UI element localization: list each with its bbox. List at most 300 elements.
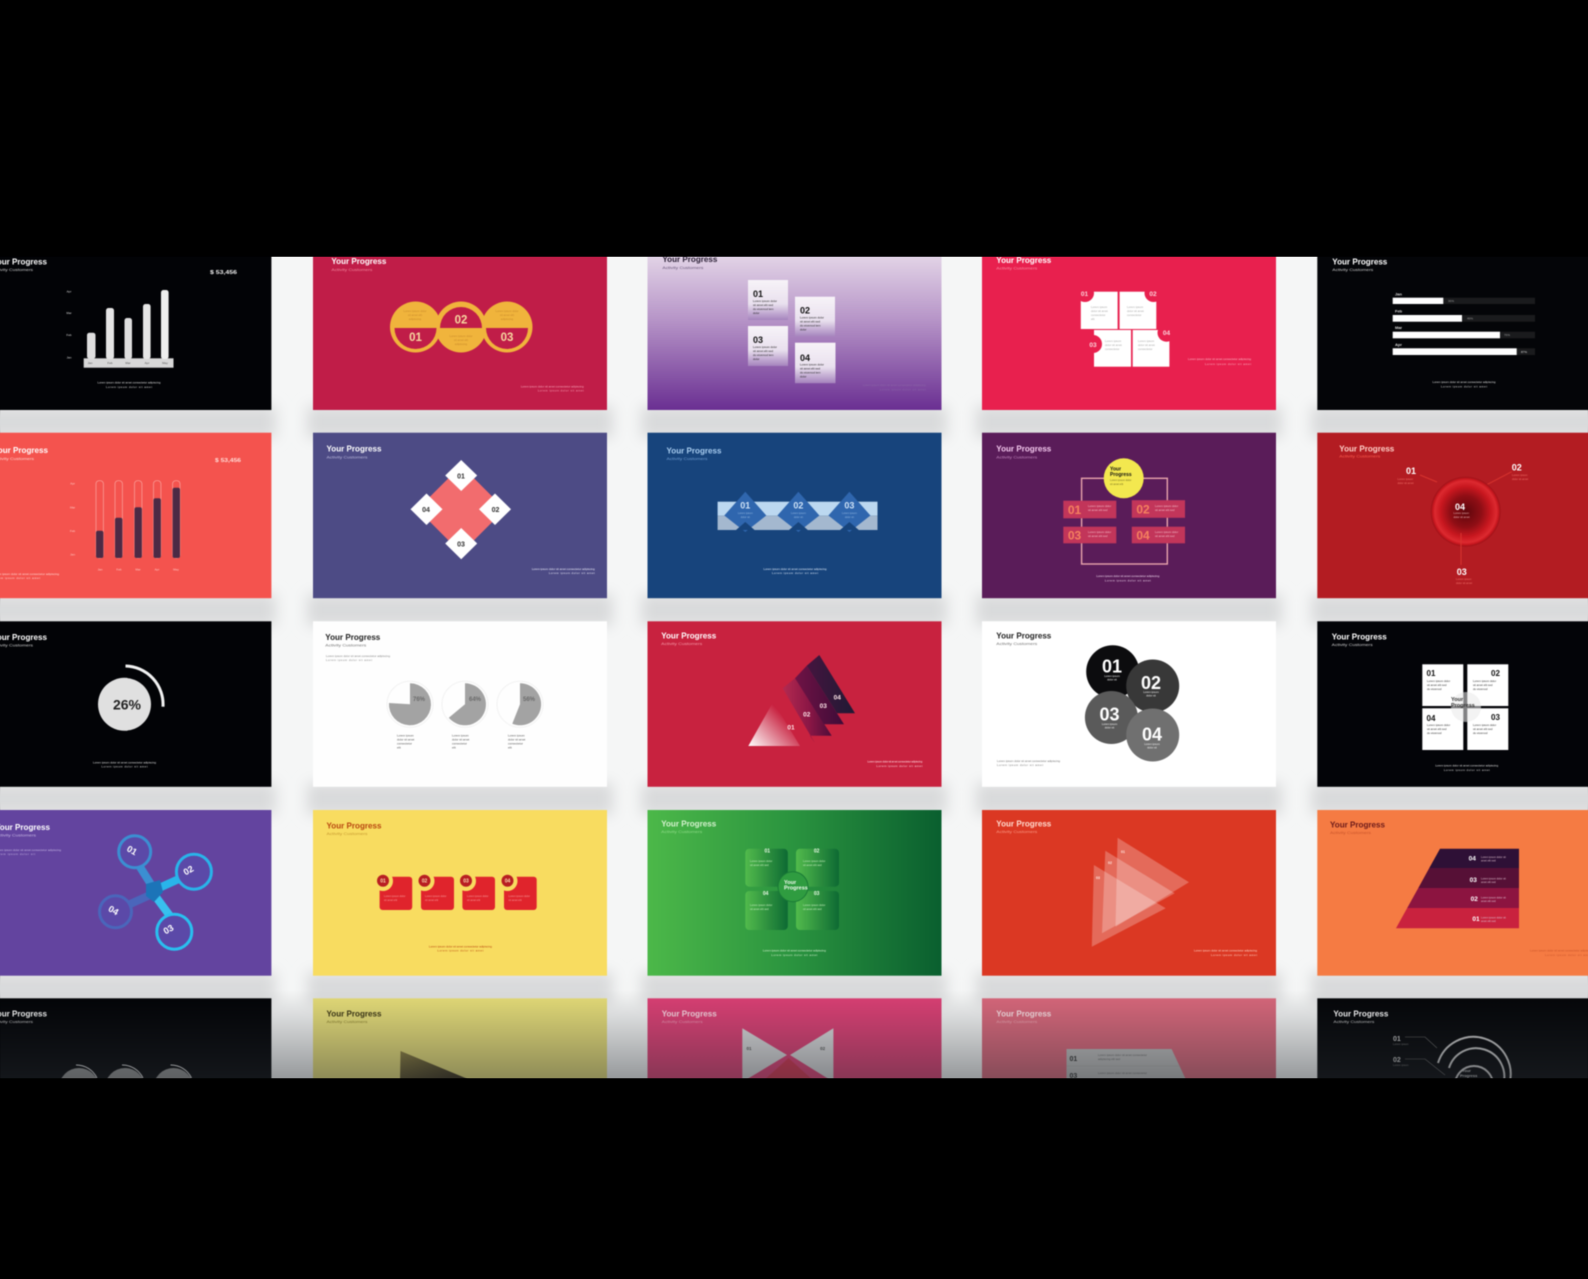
heading xyxy=(326,444,382,460)
heading: Your Progress xyxy=(996,819,1052,829)
caption xyxy=(1188,357,1251,366)
heading: Activity Customers xyxy=(1339,454,1380,458)
quad cards: do eiusmod xyxy=(1473,687,1488,691)
hub and spokes: 01 xyxy=(125,844,139,857)
heading xyxy=(1332,631,1387,647)
panel: white pies slide xyxy=(313,621,607,787)
caption: Lorem ipsum dolor sit amet xyxy=(876,764,923,768)
panel: green gradient cards slide xyxy=(648,810,942,976)
puzzle cards: elit xyxy=(1091,317,1095,321)
band with diamonds: dolor sit xyxy=(845,515,854,519)
diamond diagram: 02 xyxy=(492,507,499,514)
heading: Your Progress xyxy=(996,255,1052,265)
red tabbed cards: 03 xyxy=(463,878,469,884)
card 03: 03 xyxy=(753,335,763,345)
labelled ribbons: 02 xyxy=(1136,502,1150,516)
panel: black pies slide, clipped xyxy=(0,998,271,1108)
radial dial: 04 xyxy=(1455,502,1465,512)
caption xyxy=(429,944,492,952)
diamond diagram: 03 xyxy=(457,542,465,548)
bar chart: Jan xyxy=(88,361,93,365)
radial dial: Lorem ipsum xyxy=(1454,511,1470,515)
linked circles: sit amet elit xyxy=(500,313,514,317)
slanted table: adipiscing elit sed xyxy=(1098,1057,1121,1061)
labelled ribbons: Lorem ipsum dolor xyxy=(1088,530,1111,534)
labelled ribbons: Lorem ipsum dolor xyxy=(1088,504,1111,508)
cards and hub: Your xyxy=(784,880,797,886)
panel: orange trapezoid slide xyxy=(1317,810,1588,976)
card 04: Lorem ipsum dolor xyxy=(800,362,824,366)
puzzle cards: Lorem ipsum xyxy=(1091,305,1108,309)
linked circles: adipiscing xyxy=(409,317,422,321)
cards and hub: Lorem ipsum dolor xyxy=(803,903,825,907)
heading: Your Progress xyxy=(331,256,387,266)
caption: Lorem ipsum dolor sit amet consectetur adipiscing xyxy=(98,380,161,384)
stacked trapezoid: amet elit sed xyxy=(1481,899,1496,903)
diamond diagram xyxy=(410,460,511,559)
heading xyxy=(996,255,1052,270)
band with diamonds: dolor sit xyxy=(741,515,750,519)
caption xyxy=(521,384,584,392)
puzzle cards: 04 xyxy=(1163,330,1170,337)
heading: Activity Customers xyxy=(996,266,1037,270)
slanted table xyxy=(1066,1049,1187,1082)
puzzle cards: 02 xyxy=(1149,291,1157,298)
diamond diagram: 04 xyxy=(422,507,430,514)
heading xyxy=(0,257,47,272)
heading: Activity Customers xyxy=(326,1019,368,1024)
heading: Activity Customers xyxy=(1333,1019,1374,1024)
card 03: sit amet elit sed xyxy=(753,349,773,353)
horizontal bar chart: 36% xyxy=(1448,299,1454,303)
puzzle cards: consectetur xyxy=(1091,313,1106,317)
heading xyxy=(1333,1009,1389,1024)
band with diamonds: Lorem ipsum xyxy=(842,511,857,515)
heading xyxy=(661,819,717,834)
stacked trapezoid: amet elit sed xyxy=(1481,858,1496,862)
overlapping circles: 02 xyxy=(1141,673,1161,693)
card 03: Lorem ipsum dolor xyxy=(753,345,777,349)
overlapping circles: dolor sit xyxy=(1107,678,1117,682)
bar chart: Feb xyxy=(116,568,122,572)
heading: Your Progress xyxy=(996,630,1052,640)
heading: Your Progress xyxy=(326,820,382,830)
pie charts: 56% xyxy=(523,697,536,703)
card 04 xyxy=(795,343,836,383)
puzzle cards: consectetur xyxy=(1138,347,1153,351)
heading xyxy=(331,256,387,272)
card 01: dolor xyxy=(753,311,759,315)
heading xyxy=(1330,819,1385,835)
panel: plum frame slide xyxy=(982,433,1276,598)
caption xyxy=(93,760,156,768)
cards and hub: Lorem ipsum dolor xyxy=(803,859,825,863)
card 01: 01 xyxy=(753,289,763,299)
pie charts: 76% xyxy=(413,697,426,703)
progress gauge xyxy=(98,666,163,731)
concentric arcs: 02 xyxy=(1393,1057,1401,1064)
overlapping circles: Lorem ipsum xyxy=(1102,722,1118,726)
radial dial: 02 xyxy=(1512,462,1522,472)
quad cards: 01 xyxy=(1426,669,1436,678)
card 01: do eiusmod tem xyxy=(753,307,774,311)
quad cards: do eiusmod xyxy=(1427,731,1442,735)
panel: indigo diamond slide xyxy=(313,433,607,598)
yellow hub: Your xyxy=(1110,466,1121,472)
card 02 xyxy=(795,297,835,337)
caption: Lorem ipsum dolor sit amet consectetur adipiscing xyxy=(429,944,492,948)
heading: Your Progress xyxy=(661,630,717,640)
concentric arcs: Lorem ipsum xyxy=(1393,1042,1409,1046)
bar chart: Apr xyxy=(145,361,149,365)
band with diamonds: 01 xyxy=(740,500,750,510)
heading: Activity Customers xyxy=(1332,267,1373,272)
linked circles: adipiscing xyxy=(455,342,468,346)
bowtie xyxy=(742,1028,833,1082)
overlapping circles: 01 xyxy=(1102,656,1122,676)
overlapping circles: Lorem ipsum xyxy=(1143,690,1160,694)
slanted table: 01 xyxy=(1070,1056,1077,1063)
heading: Activity Customers xyxy=(996,1019,1037,1024)
red tabbed cards: Lorem ipsum dolor xyxy=(425,894,447,898)
caption: Lorem ipsum dolor sit amet consectetur adipiscing xyxy=(1194,948,1257,952)
band with diamonds: dolor sit xyxy=(794,515,803,519)
overlapping circles: 03 xyxy=(1099,704,1120,724)
panel: black bar chart slide xyxy=(0,244,271,410)
red tabbed cards: 04 xyxy=(505,878,510,884)
red tabbed cards xyxy=(373,871,537,910)
card 02: do eiusmod tem xyxy=(800,324,821,328)
radial dial: dolor sit amet xyxy=(1398,481,1414,485)
card 04: do eiusmod tem xyxy=(800,370,821,374)
linked circles xyxy=(390,302,532,352)
heading: Your Progress xyxy=(996,1009,1052,1019)
panel: coral bar chart slide xyxy=(0,433,271,598)
caption xyxy=(1435,764,1499,772)
panel: crimson three circles slide xyxy=(313,244,607,410)
red tabbed cards: 02 xyxy=(422,878,427,884)
card 01: Lorem ipsum dolor xyxy=(753,299,777,303)
labelled ribbons: 01 xyxy=(1068,503,1081,517)
puzzle cards xyxy=(1080,290,1171,368)
panel: red radial slide xyxy=(1317,433,1588,598)
caption xyxy=(866,385,925,390)
caption: Lorem ipsum dolor sit amet consectetur adipiscing xyxy=(763,948,826,952)
heading: Activity Customers xyxy=(661,641,702,646)
stacked trapezoid: Lorem ipsum dolor sit xyxy=(1481,916,1506,920)
radial dial: dolor sit amet xyxy=(1456,581,1472,585)
band with diamonds: Lorem ipsum xyxy=(738,511,753,515)
heading xyxy=(325,632,381,648)
stacked trapezoid: amet elit sed xyxy=(1481,880,1496,884)
heading: Activity Customers xyxy=(666,456,708,461)
cards and hub: sit amet elit sed xyxy=(750,907,769,911)
yellow hub: Lorem ipsum dolor xyxy=(1110,478,1132,482)
heading: Activity Customers xyxy=(1332,642,1373,647)
stacked trapezoid: amet elit sed xyxy=(1481,919,1496,923)
card 03: do eiusmod tem xyxy=(753,353,774,357)
caption: Lorem ipsum dolor sit amet consectetur adipiscing xyxy=(1432,380,1496,384)
stacked trapezoid: Lorem ipsum dolor sit xyxy=(1481,855,1506,859)
linked circles: 03 xyxy=(501,332,513,344)
caption: Lorem ipsum dolor sit amet xyxy=(1205,362,1251,366)
labelled ribbons: Lorem ipsum dolor xyxy=(1155,504,1178,508)
bar chart: Apr xyxy=(67,290,71,294)
heading: Your Progress xyxy=(1333,1009,1389,1019)
caption: Lorem ipsum dolor sit amet xyxy=(1444,768,1490,772)
total value: $ 53,456 xyxy=(215,458,241,464)
puzzle cards: dolor sit amet xyxy=(1105,343,1122,347)
linked circles: sit amet elit xyxy=(408,313,422,317)
intro text xyxy=(326,654,390,662)
caption: Lorem ipsum dolor sit amet consectetur adipiscing xyxy=(764,567,827,571)
puzzle cards: Lorem ipsum xyxy=(1127,305,1144,309)
caption xyxy=(764,567,827,575)
card 03: dolor xyxy=(753,357,759,361)
heading: Activity Customers xyxy=(662,1019,703,1024)
pie charts: consectetur xyxy=(508,742,523,746)
bar chart: May xyxy=(173,568,179,572)
caption: Lorem ipsum dolor sit amet xyxy=(538,388,584,392)
heading xyxy=(0,445,48,461)
radial dial xyxy=(1398,462,1528,585)
bar chart: Apr xyxy=(155,568,159,572)
heading xyxy=(326,820,382,836)
cards and hub: 03 xyxy=(814,891,820,897)
horizontal bar chart: Feb xyxy=(1395,308,1403,314)
overlapping triangles: 03 xyxy=(1096,876,1100,880)
panel: black donut 26% slide xyxy=(0,621,271,787)
linked circles: adipiscing xyxy=(501,317,514,321)
card 02: dolor xyxy=(800,328,806,332)
heading: Your Progress xyxy=(1332,256,1388,266)
panel: crimson stepped triangle slide xyxy=(648,621,942,787)
bar chart: Apr xyxy=(70,482,75,486)
pie charts: consectetur xyxy=(397,742,412,746)
overlapping triangles: 02 xyxy=(1108,861,1112,865)
band with diamonds xyxy=(718,492,878,532)
pie charts: Lorem ipsum xyxy=(508,734,525,738)
heading xyxy=(662,256,718,270)
intro text: Lorem ipsum dolor sit amet xyxy=(326,658,372,662)
overlapping circles: Lorem ipsum xyxy=(1144,742,1161,746)
heading: Your Progress xyxy=(1330,819,1385,829)
caption: Lorem ipsum dolor sit amet consectetur adipiscing xyxy=(532,567,595,571)
panel: navy diamonds band slide xyxy=(648,433,942,598)
quad cards: Lorem ipsum dolor xyxy=(1427,723,1450,727)
puzzle cards: 01 xyxy=(1081,291,1088,298)
labelled ribbons: sit amet elit sed xyxy=(1155,508,1175,512)
heading xyxy=(0,632,47,648)
red tabbed cards: sit amet elit xyxy=(508,898,522,902)
card 02: 02 xyxy=(800,306,810,316)
linked circles: Lorem ipsum dolor xyxy=(495,309,519,313)
heading: Activity Customers xyxy=(661,829,702,834)
horizontal bar chart: Mar xyxy=(1395,325,1403,330)
heading: Your Progress xyxy=(996,444,1052,454)
radial dial: Lorem ipsum xyxy=(1456,577,1472,581)
pie charts: elit xyxy=(452,746,456,750)
red tabbed cards: 01 xyxy=(380,878,386,884)
heading: Activity Customers xyxy=(996,829,1037,834)
heading xyxy=(1339,444,1395,458)
puzzle cards: Lorem ipsum xyxy=(1138,339,1155,343)
pie charts: dolor sit amet xyxy=(508,738,526,742)
linked circles: 01 xyxy=(409,332,422,344)
card 01 xyxy=(748,280,788,320)
heading: Your Progress xyxy=(666,445,722,455)
pie charts xyxy=(387,681,543,750)
puzzle cards: 03 xyxy=(1089,342,1097,349)
slanted table: 03 xyxy=(1070,1073,1077,1080)
horizontal bar chart xyxy=(1393,292,1535,355)
pie charts: elit xyxy=(397,746,401,750)
linked circles: 02 xyxy=(455,314,467,326)
panel: red puzzle cards slide xyxy=(982,244,1276,410)
caption xyxy=(1194,948,1257,957)
quad cards: sit amet elit sed xyxy=(1473,727,1493,731)
heading: Activity Customers xyxy=(325,643,366,648)
cards and hub: sit amet elit sed xyxy=(803,863,822,867)
overlapping triangles: 01 xyxy=(1121,850,1125,854)
card 02: sit amet elit sed xyxy=(800,320,820,324)
caption xyxy=(0,572,59,580)
panel: salmon table slide, clipped xyxy=(982,998,1276,1088)
panel: black arcs slide, clipped xyxy=(1317,998,1588,1088)
heading: Activity Customers xyxy=(331,267,372,272)
dark triangle xyxy=(400,1051,475,1082)
red tabbed cards: sit amet elit xyxy=(467,898,480,902)
red tabbed cards: sit amet elit xyxy=(425,898,438,902)
caption: Lorem ipsum dolor sit amet xyxy=(997,763,1043,767)
heading xyxy=(1332,256,1388,272)
hub and spokes xyxy=(100,836,211,949)
heading xyxy=(661,630,717,646)
radial dial: Lorem ipsum xyxy=(1512,473,1528,477)
cards and hub: sit amet elit sed xyxy=(750,863,769,867)
bar chart: Jan xyxy=(67,356,72,360)
caption: Lorem ipsum dolor sit amet consectetur adipiscing xyxy=(1188,357,1251,361)
concentric arcs: Lorem ipsum xyxy=(1393,1063,1409,1067)
heading xyxy=(996,630,1052,646)
horizontal bar chart: Apr xyxy=(1395,342,1402,347)
stepped triangle: 02 xyxy=(803,712,811,718)
caption: Lorem ipsum dolor sit amet consectetur adipiscing xyxy=(93,760,156,764)
quad cards: Progress xyxy=(1451,703,1475,709)
overlapping circles: dolor sit xyxy=(1147,746,1157,750)
intro text xyxy=(0,848,61,856)
panel: black quad cards slide xyxy=(1317,621,1588,787)
bar chart: Mar xyxy=(125,361,131,365)
cards and hub: 01 xyxy=(765,848,770,854)
quad cards xyxy=(1422,664,1508,750)
labelled ribbons: 03 xyxy=(1068,528,1081,542)
linked circles: Lorem ipsum dolor xyxy=(403,309,427,313)
heading xyxy=(662,1009,717,1024)
overlapping circles xyxy=(1085,645,1179,762)
concentric arcs: 01 xyxy=(1393,1036,1401,1043)
stacked trapezoid xyxy=(1396,849,1519,928)
heading xyxy=(326,1009,382,1024)
bar chart: Feb xyxy=(66,333,72,337)
caption: Lorem ipsum dolor sit amet xyxy=(1441,384,1487,388)
bar chart: Mar xyxy=(135,568,141,572)
red tabbed cards: Lorem ipsum dolor xyxy=(467,894,489,898)
caption: Lorem ipsum dolor sit amet xyxy=(1211,953,1257,957)
heading xyxy=(0,1009,47,1024)
caption: Lorem ipsum dolor sit amet consectetur adipiscing xyxy=(1435,764,1499,768)
labelled ribbons: sit amet elit sed xyxy=(1088,508,1108,512)
cards and hub: sit amet elit sed xyxy=(803,907,822,911)
pie charts: dolor sit amet xyxy=(452,738,470,742)
quad cards: sit amet elit sed xyxy=(1427,727,1447,731)
puzzle cards: Lorem ipsum xyxy=(1105,339,1122,343)
hub and spokes: 03 xyxy=(162,923,175,936)
pie charts: Lorem ipsum xyxy=(397,734,414,738)
pie charts: elit xyxy=(508,746,512,750)
panel: orange-red triangles slide xyxy=(982,810,1276,976)
heading: Your Progress xyxy=(662,1009,717,1019)
concentric arcs: Progress xyxy=(1460,1073,1478,1078)
card 04: sit amet elit sed xyxy=(800,366,820,370)
radial dial: dolor sit amet xyxy=(1512,477,1528,481)
radial dial: Lorem ipsum xyxy=(1398,477,1414,481)
caption xyxy=(98,380,161,389)
heading: Your Progress xyxy=(1339,444,1395,454)
concentric arcs xyxy=(1393,1036,1511,1085)
heading xyxy=(996,819,1052,834)
slanted table: Lorem ipsum dolor sit amet consectetur xyxy=(1098,1071,1147,1075)
cards and hub: Lorem ipsum dolor xyxy=(750,903,772,907)
caption xyxy=(763,948,826,957)
frame xyxy=(1082,478,1167,564)
bar chart xyxy=(66,290,174,368)
labelled ribbons xyxy=(1063,500,1185,543)
quad cards: 03 xyxy=(1491,713,1500,722)
stacked trapezoid: 01 xyxy=(1472,916,1480,923)
hub and spokes: 02 xyxy=(182,864,195,877)
caption xyxy=(867,760,923,768)
radial dial: 01 xyxy=(1406,466,1416,476)
band with diamonds: 02 xyxy=(793,500,803,510)
horizontal bar chart: 76% xyxy=(1504,333,1510,337)
heading xyxy=(996,444,1052,460)
bar chart xyxy=(70,481,180,572)
quad cards: Lorem ipsum dolor xyxy=(1473,679,1496,683)
heading: Activity Customers xyxy=(326,831,368,836)
pie charts: dolor sit amet xyxy=(397,738,415,742)
heading: Activity Customers xyxy=(1330,830,1371,835)
puzzle cards: consectetur xyxy=(1127,313,1142,317)
stacked trapezoid: Lorem ipsum dolor sit xyxy=(1481,896,1506,900)
labelled ribbons: Lorem ipsum dolor xyxy=(1155,530,1178,534)
bar chart: Jan xyxy=(70,552,75,556)
bowtie: 01 xyxy=(746,1046,752,1051)
heading: Your Progress xyxy=(1332,631,1387,641)
pie charts: 64% xyxy=(469,697,482,703)
cards and hub xyxy=(745,848,839,930)
cards and hub: Lorem ipsum dolor xyxy=(750,859,772,863)
progress gauge: 26% xyxy=(113,696,142,712)
overlapping circles: dolor sit xyxy=(1146,694,1156,698)
overlapping circles: Lorem ipsum xyxy=(1104,674,1121,678)
bar chart: Mar xyxy=(70,506,75,510)
overlapping circles: dolor sit xyxy=(1105,726,1114,730)
labelled ribbons: sit amet elit sed xyxy=(1088,534,1108,538)
concentric arcs: Your xyxy=(1462,1068,1471,1073)
yellow hub xyxy=(1104,458,1144,498)
overlapping triangles xyxy=(1092,838,1189,947)
